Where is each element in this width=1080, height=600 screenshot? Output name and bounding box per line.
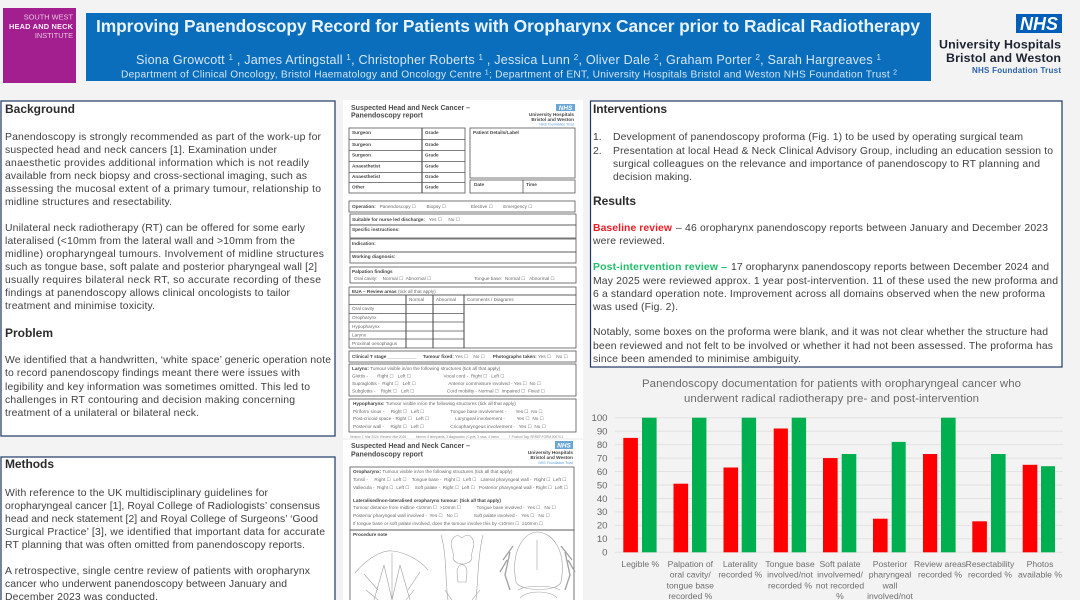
authors: 1 (877, 53, 882, 62)
staff table: Grade (425, 164, 439, 168)
authors: Siona Growcott (136, 53, 225, 67)
numbered list: interventions: surgical colleagues on the relevance and importance of panendoscopy to RT planning and (613, 159, 1040, 170)
EUA review areas table: Oral cavity (352, 306, 375, 311)
figure 1: panendoscopy proforma page 1: Suspected Head and Neck Cancer – (351, 105, 470, 112)
clinical T stage: Clinical T stage ___________ Tumour fixed: Yes ☐ No ☐ Photographs taken: Yes ☐ No ☐ (352, 354, 569, 359)
category labels: Soft palate (819, 559, 861, 569)
y axis labels: 60 (597, 467, 608, 478)
heading: problem: Problem (5, 326, 53, 340)
y axis labels: 40 (597, 494, 608, 505)
palpation findings: Palpation findings (352, 269, 393, 274)
oropharynx box: Posterior pharyngeal wall involved - Yes ☐ No ☐ Soft palate involved - Yes ☐ No ☐ (353, 513, 551, 518)
category labels: involved/not (767, 570, 814, 580)
category labels (621, 559, 1062, 600)
y axis labels: 0 (602, 548, 608, 559)
text block: notable findings: since been amended to minimise ambiguity. (593, 354, 801, 365)
category labels: Review areas (914, 559, 966, 569)
EUA review areas table: Comments / Diagrams (467, 297, 514, 302)
chart title (642, 378, 1021, 405)
text block: background paragraph 1: available from neck biopsy and cross-sectional imaging, such as (5, 171, 307, 182)
authors: , Jessica Lunn (483, 53, 574, 67)
affiliations: Department of Clinical Oncology, Bristol Haematology and Oncology Centre (121, 70, 481, 80)
logo: NHS University Hospitals Bristol and Weston: NHS (1020, 14, 1058, 34)
category labels: recorded % (718, 570, 763, 580)
category labels: not recorded (816, 580, 864, 590)
panel: interventions and results (590, 101, 1062, 367)
text block: background paragraph 1: Panendoscopy is strongly recommended as part of the work-up for (5, 132, 322, 143)
figure 1: panendoscopy proforma page 2: NHS Foundation Trust (538, 461, 573, 465)
figure 1: panendoscopy proforma page 1: Version 1 Mar 2024 Review: Mar 2026 Interim: 5 timepoints, 3 diagnostics | Cycle, 3 rows, 4 tumor T Product Tag: SRREF.FORM.00070.1 (350, 435, 564, 439)
text block: notable findings (593, 327, 1053, 365)
EUA review areas table: Abnormal (436, 297, 456, 302)
text block: notable findings: Notably, some boxes on the proforma were blank, and it was not clear whether the structure had (593, 327, 1048, 338)
y axis labels (591, 413, 608, 559)
drawing: hypopharynx (441, 535, 483, 600)
text block: methods: Surgical Practice’ [3], we identified that important data for accurate (5, 527, 325, 538)
logo: South West Head and Neck Institute: INSTITUTE (35, 31, 73, 40)
text block: methods: RT planning that was often omitted from panendoscopy reports. (5, 540, 305, 551)
figure 1: panendoscopy proforma page 1: Bristol and Weston (531, 117, 574, 122)
authors: , Sarah Hargreaves (760, 53, 876, 67)
logo: South West Head and Neck Institute: SOUTH WEST (24, 12, 73, 22)
heading: interventions: Interventions (593, 102, 667, 116)
text block: methods: A retrospective, single centre review of patients with oropharynx (5, 566, 311, 577)
EUA review areas table: EUA – Review areas (tick all that apply) (352, 289, 436, 294)
EUA review areas table: Proximal oesophagus (352, 341, 398, 346)
numbered list: interventions: 1. (593, 132, 602, 143)
chart title: Panendoscopy documentation for patients with oropharyngeal cancer who (642, 378, 1021, 390)
text block: problem: to record panendoscopy findings meant there were issues with (5, 368, 300, 379)
authors: 2 (755, 53, 760, 62)
authors: 1 (479, 53, 484, 62)
text block: background paragraph 2: Unilateral neck radiotherapy (RT) can be offered for some early (5, 223, 306, 234)
figure 1: panendoscopy proforma page 2: Bristol and Weston (530, 455, 573, 460)
text block: baseline review: Baseline review (593, 223, 673, 234)
text block: baseline review: – 46 oropharynx panendoscopy reports between January and December 2023 (676, 223, 1048, 234)
EUA review areas table: Normal (409, 297, 424, 302)
category labels: Posterior (873, 559, 907, 569)
oropharynx box: Vallecula - Right ☐ Left ☐ Soft palate - Right ☐ Left ☐ Posterior pharyngeal wall - Right ☐ Left ☐ (353, 485, 569, 490)
text block: background paragraph 1: assessing the mucosal extent of a primary tumour, relationship to (5, 184, 321, 195)
oropharynx box: Lateralised/non-lateralised oropharynx tumour: (tick all that apply) (353, 498, 501, 503)
EUA review areas table: Hypopharynx (352, 324, 380, 329)
text block: background paragraph 2: treatment and minimise toxicity. (5, 301, 155, 312)
affiliations: 1 (485, 70, 489, 76)
authors: 1 (229, 53, 234, 62)
oropharynx box: Tonsil - Right ☐ Left ☐ Tongue base - Right ☐ Left ☐ Lateral pharyngeal wall - Right ☐ Left ☐ (353, 477, 567, 482)
staff table: Grade (425, 184, 439, 190)
category labels: Laterality (723, 559, 758, 569)
text block: background paragraph 2 (5, 223, 324, 312)
logo: NHS University Hospitals Bristol and Weston: NHS Foundation Trust (972, 66, 1061, 75)
figure 1: panendoscopy proforma page 1: University Hospitals (529, 112, 574, 117)
text block: problem: challenges in RT contouring and decision making concerning (5, 395, 295, 406)
figure 1: panendoscopy proforma page 1: Panendoscopy report (351, 112, 424, 120)
text block: background paragraph 2: usually requires bilateral neck RT, so accurate recording of these (5, 275, 321, 286)
category labels: recorded % (768, 580, 812, 590)
figure 1: panendoscopy proforma page 2: NHS (557, 442, 571, 450)
drawing: larynx (355, 551, 428, 600)
category labels: involvemed/ (817, 570, 864, 580)
procedure note with anatomical drawings (350, 530, 575, 600)
authors: , Christopher Roberts (351, 53, 478, 67)
operation rows: Specific instructions: (352, 227, 400, 232)
text block: background paragraph 2: such as tongue base, soft palate and posterior pharyngeal wall [2] (5, 262, 317, 273)
figure 1: panendoscopy proforma page 2 (343, 440, 583, 600)
heading: results: Results (593, 194, 636, 208)
y axis labels: 30 (597, 507, 608, 518)
larynx box: Glottis - Right ☐ Left ☐ Vocal cord - Right ☐ Left ☐ (352, 374, 505, 378)
title banner (86, 13, 931, 81)
staff table: Surgeon (352, 142, 371, 147)
affiliations: ; Department of ENT, University Hospitals Bristol and Weston NHS Foundation Trust (489, 70, 893, 80)
numbered list: interventions: Development of panendoscopy proforma (Fig. 1) to be used by operating surgical team (613, 132, 1023, 143)
text block: methods: With reference to the UK multidisciplinary guidelines for (5, 488, 269, 499)
y axis labels: 80 (597, 440, 608, 451)
operation rows: Suitable for nurse led discharge: Yes ☐ No ☐ (352, 217, 461, 222)
category labels: pharyngeal (869, 570, 911, 580)
category labels: Photos (1027, 559, 1053, 569)
text block: problem: treatment of a unilateral or bilateral neck. (5, 408, 199, 419)
figure 1: panendoscopy proforma page 2: Suspected Head and Neck Cancer – (351, 443, 470, 450)
staff table: Surgeon (352, 152, 371, 158)
category labels: tongue base (667, 580, 714, 590)
text block: post-intervention review (592, 262, 1058, 313)
EUA review areas table (349, 287, 576, 348)
oropharynx box: If tongue base or soft palate involved, does the tumour involve this by <10mm ☐ ≥10mm ☐ (353, 521, 544, 526)
y axis labels: 70 (597, 453, 608, 464)
oropharynx box: Oropharynx: Tumour visible in/on the following structures (tick all that apply) (353, 469, 513, 474)
text block: methods: cancer who underwent panendoscopy between January and (5, 579, 287, 590)
text block: background paragraph 2: lateralised (<10mm from the lateral wall and >10mm from the (5, 236, 295, 247)
operation rows: Indication: (352, 241, 376, 246)
staff table: Grade (425, 152, 439, 158)
text block: methods (5, 488, 325, 600)
numbered list: interventions (593, 132, 1053, 183)
authors: 2 (574, 53, 579, 62)
text block: post-intervention review: 6 a standard operation note. Improvement across all domains observed when the new proforma (593, 289, 1045, 300)
hypopharynx box (349, 399, 576, 432)
patient details box: Patient Details/Label (473, 130, 519, 135)
logo: NHS University Hospitals Bristol and Weston: University Hospitals (939, 38, 1061, 52)
heading: background: Background (5, 102, 75, 116)
figure 1: panendoscopy proforma page 1: NHS Foundation Trust (539, 122, 574, 126)
authors: 2 (654, 53, 659, 62)
numbered list: interventions: decision making. (613, 172, 692, 183)
staff table (349, 128, 465, 193)
text block: post-intervention review: was used (Fig. 2). (592, 302, 678, 313)
patient details box (470, 128, 575, 193)
y axis labels: 90 (597, 426, 608, 438)
text block: notable findings: been reviewed and not felt to be involved or whether it had not been assessed. The proforma has (593, 341, 1053, 352)
text block: background paragraph 1: midline structures and resectability. (5, 197, 172, 208)
category labels: Tongue base (765, 559, 815, 569)
EUA review areas table: Larynx (352, 332, 367, 338)
operation rows (349, 201, 576, 263)
numbered list: interventions: 2. (593, 146, 602, 157)
y axis labels: 50 (597, 480, 608, 491)
text block: background paragraph 1: anaesthetic provides additional information which is not readily (5, 158, 310, 169)
text block: methods: head and neck statement [2] and Royal College of Surgeons’ ‘Good (5, 514, 318, 525)
hypopharynx box: Hypopharynx: Tumour visible in/on the following structures (tick all that apply) (353, 401, 516, 406)
bar chart: panendoscopy documentation pre and post intervention (591, 378, 1063, 600)
staff table: Surgeon (352, 130, 371, 135)
palpation findings: Oral cavity: Normal ☐ Abnormal ☐ Tongue base: Normal ☐ Abnormal ☐ (354, 276, 555, 281)
larynx box (349, 364, 576, 396)
chart title: underwent radical radiotherapy pre- and post-intervention (684, 393, 979, 405)
y axis labels: 100 (591, 413, 608, 424)
hypopharynx box: Piriform sinus - Right ☐ Left ☐ Tongue base involvement - Yes ☐ No ☐ (353, 409, 544, 414)
patient details box: Time (526, 182, 537, 187)
figure 1: panendoscopy proforma page 2: University Hospitals (528, 450, 573, 455)
text block: post-intervention review: 17 oropharynx panendoscopy reports between December 2024 and (731, 262, 1049, 273)
authors: , Oliver Dale (578, 53, 654, 67)
operation rows: Operation: Panendoscopy ☐ Biopsy ☐ Elective ☐ Emergency ☐ (352, 204, 533, 209)
category labels: Resectability (966, 559, 1015, 569)
logo: NHS University Hospitals Bristol and Weston: Bristol and Weston (946, 51, 1061, 65)
pre-intervention bars (red) (623, 428, 1037, 552)
drawing: oral cavity (500, 532, 575, 598)
hypopharynx box: Posterior wall - Right ☐ Left ☐ Cricopharyngeus involvement - Yes ☐ No ☐ (353, 424, 547, 429)
authors: , James Artingstall (233, 53, 346, 67)
affiliations: 2 (893, 70, 897, 76)
y axis labels: 20 (597, 521, 608, 532)
EUA review areas table: Oropharynx (352, 315, 377, 320)
palpation findings (350, 267, 576, 283)
staff table: Anaesthetist (352, 174, 381, 179)
clinical T stage (349, 351, 576, 362)
patient details box: Date (474, 182, 485, 187)
text block: methods: oropharyngeal cancer [1], Royal College of Radiologists’ consensus (5, 501, 320, 512)
category labels: wall (882, 580, 897, 590)
oropharynx box (350, 467, 574, 530)
category labels: recorded % (918, 570, 962, 580)
larynx box: Supraglottis - Right ☐ Left ☐ Anterior commissure involved - Yes ☐ No ☐ (352, 381, 542, 386)
text block: background paragraph 2: findings at panendoscopy allows clinical oncologists to tailor (5, 288, 291, 299)
category labels: Legible % (621, 559, 660, 569)
category labels: Palpation of (668, 559, 714, 569)
text block: problem: legibility and key information was sometimes omitted. This led to (5, 382, 310, 393)
y axis labels: 10 (597, 534, 608, 545)
category labels: available % (1018, 570, 1062, 580)
staff table: Grade (425, 142, 439, 147)
text block: problem: We identified that a handwritten, ‘white space’ generic operation note (5, 355, 331, 366)
logo: South West Head and Neck Institute (3, 8, 76, 83)
text block: background paragraph 1: suspected head and neck cancers [1]. Examination under (5, 145, 278, 156)
title: Improving Panendoscopy Record for Patients with Oropharynx Cancer prior to Radical Radiotherapy (96, 16, 920, 36)
text block: baseline review: were reviewed. (592, 236, 665, 247)
logo: NHS University Hospitals Bristol and Weston (939, 14, 1062, 75)
text block: background paragraph 1 (5, 132, 322, 208)
authors: 1 (346, 53, 351, 62)
category labels: recorded % (968, 570, 1012, 580)
text block: background paragraph 2: midline) oropharyngeal tumours. Involvement of midline structures (5, 249, 324, 260)
numbered list: interventions: Presentation at local Head & Neck Clinical Advisory Group, including an education session to (613, 146, 1053, 157)
text block: post-intervention review: May 2025 were reviewed approx. 1 year post-intervention. 11 of these used the new proforma and (593, 276, 1058, 287)
larynx box: Larynx: Tumour visible in/on the following structures (tick all that apply) (352, 366, 501, 371)
staff table: Grade (425, 130, 439, 135)
operation rows: Working diagnosis: (352, 254, 396, 259)
staff table: Other (352, 184, 365, 190)
heading: methods: Methods (5, 457, 54, 471)
post-intervention bars (green) (642, 418, 1055, 552)
oropharynx box: Tumour distance from midline <10mm ☐ >10mm ☐ Tongue base involved - Yes ☐ No ☐ (353, 505, 557, 510)
figure 1: panendoscopy proforma page 1 (343, 100, 583, 439)
text block: post-intervention review: Post-intervention review – (593, 262, 727, 273)
staff table: Grade (425, 174, 439, 179)
figure 1: panendoscopy proforma page 2: Panendoscopy report (351, 452, 424, 458)
category labels: oral cavity/ (670, 570, 711, 580)
procedure note with anatomical drawings: Procedure note (353, 532, 388, 537)
panel: background and problem (1, 101, 335, 436)
panel: methods (1, 457, 335, 600)
hypopharynx box: Post-cricoid space - Right ☐ Left ☐ Laryngeal involvement - Yes ☐ No ☐ (353, 416, 545, 421)
staff table: Anaesthetist (352, 164, 381, 168)
authors: , Graham Porter (659, 53, 755, 67)
larynx box: Subglottis - Right ☐ Left ☐ Cord mobility - Normal ☐ Impaired ☐ Fixed ☐ (352, 388, 546, 394)
figure 1: panendoscopy proforma page 1: NHS (559, 105, 573, 112)
text block: baseline review (592, 223, 1048, 247)
text block: problem (5, 355, 331, 419)
logo: South West Head and Neck Institute: HEAD AND NECK (9, 22, 74, 31)
